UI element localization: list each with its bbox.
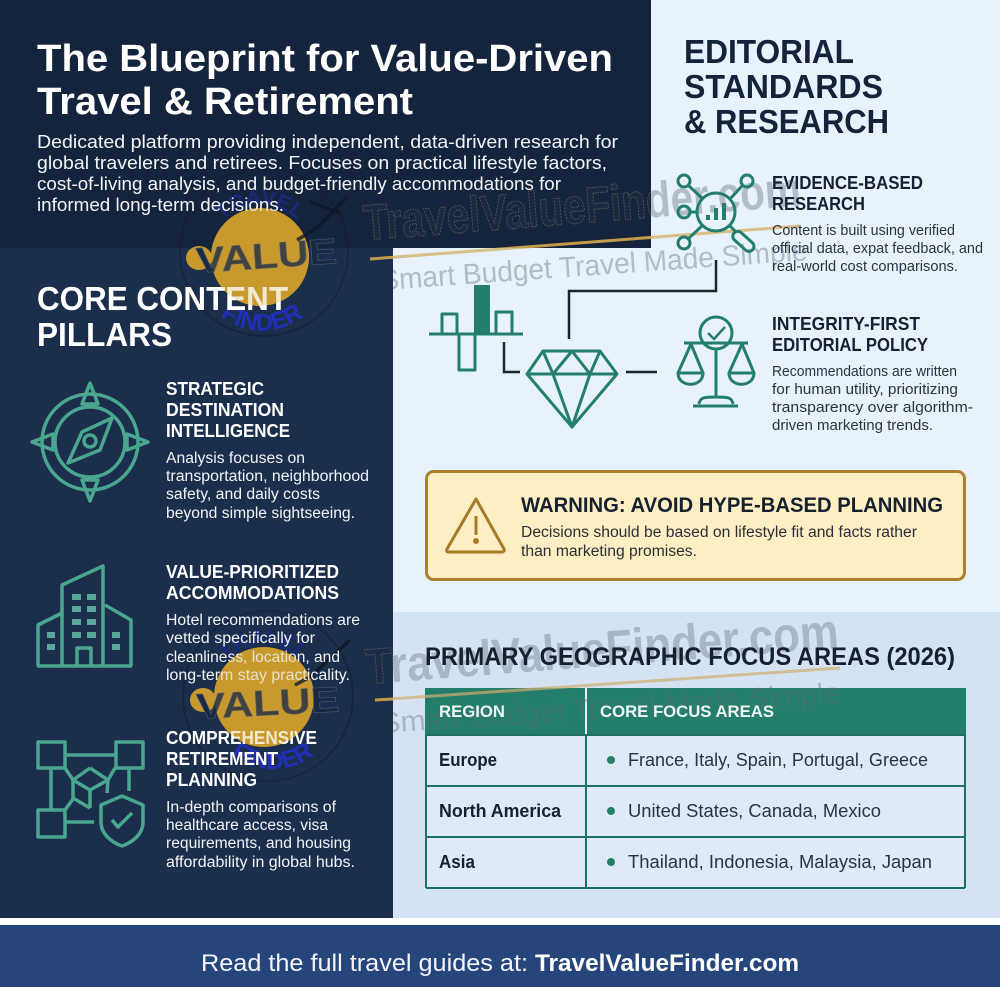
watermark: lower site name on dark: TravelValueFinder.com <box>364 603 840 695</box>
watermark: lower logo: FINDER <box>232 742 314 770</box>
text: integrity-first editorial policy: for human utility, prioritizing <box>772 382 958 398</box>
pillar: value-prioritized accommodations: vetted specifically for <box>166 630 315 647</box>
table: geographic focus: Asia <box>439 852 476 872</box>
text: integrity-first editorial policy: transparency over algorithm- <box>772 400 973 416</box>
watermark: lower site name on light: TravelValueFinder.com <box>364 603 840 695</box>
table: geographic focus <box>426 702 965 888</box>
pillar: comprehensive retirement planning: PLANNING <box>166 770 257 790</box>
icon: evidence network magnifier <box>678 175 756 253</box>
intro paragraph: cost-of-living analysis, and budget-friendly accommodations for <box>37 173 561 194</box>
icon: building <box>37 566 132 666</box>
pillar: value-prioritized accommodations <box>166 562 360 684</box>
pillar: comprehensive retirement planning: RETIREMENT <box>166 749 278 769</box>
panel: header background <box>0 0 651 248</box>
text: integrity-first editorial policy: Recommendations are written <box>772 364 957 380</box>
watermark: lower logo: VALUE <box>195 679 340 727</box>
text: evidence-based research: EVIDENCE-BASED <box>772 173 923 193</box>
pillar: strategic destination intelligence <box>166 379 369 522</box>
icon: retirement planning network <box>38 742 143 846</box>
watermark: lower site name on light: Smart Budget Travel Made Simple <box>379 678 841 740</box>
table: geographic focus: Europe <box>439 750 497 770</box>
text: integrity-first editorial policy: INTEGRITY-FIRST <box>772 314 920 334</box>
watermark: upper site name on light: TravelValueFinder.com <box>361 161 803 251</box>
panel: geographic focus background <box>393 612 1000 918</box>
pillar: comprehensive retirement planning: In-depth comparisons of <box>166 799 337 816</box>
text: evidence-based research <box>772 173 983 275</box>
pillar: comprehensive retirement planning: healthcare access, visa <box>166 817 328 834</box>
table: geographic focus: North America <box>439 801 562 821</box>
pillar: value-prioritized accommodations: Hotel recommendations are <box>166 612 360 629</box>
pillar: value-prioritized accommodations: VALUE-PRIORITIZED <box>166 562 339 582</box>
watermark: upper logo: TRAVEL <box>214 190 300 220</box>
connector: research to diamond <box>569 260 716 339</box>
watermark: lower logo: TRAVEL <box>218 630 304 660</box>
pillar: comprehensive retirement planning: affordability in global hubs. <box>166 854 355 871</box>
pillar: comprehensive retirement planning <box>166 728 355 871</box>
heading: core content pillars: CORE CONTENT <box>37 280 288 317</box>
text: evidence-based research: real-world cost comparisons. <box>772 259 958 275</box>
table: geographic focus: Thailand, Indonesia, Malaysia, Japan <box>628 852 932 872</box>
heading: core content pillars <box>37 280 288 353</box>
heading: editorial standards and research: & RESEARCH <box>684 103 889 140</box>
watermark: upper site name on dark: TravelValueFinder.com <box>361 161 803 251</box>
pillar: strategic destination intelligence: Analysis focuses on <box>166 450 305 467</box>
table: header band <box>425 688 966 735</box>
heading: primary geographic focus areas: PRIMARY GEOGRAPHIC FOCUS AREAS (2026) <box>425 643 955 671</box>
pillar: comprehensive retirement planning: COMPREHENSIVE <box>166 728 317 748</box>
watermark: upper logo: FINDER <box>222 304 304 331</box>
intro paragraph <box>37 131 618 215</box>
footer call to action <box>201 950 799 977</box>
watermark: upper site name on light: Smart Budget Travel Made Simple <box>379 235 808 297</box>
text: integrity-first editorial policy: driven marketing trends. <box>772 418 933 434</box>
callout: warning: than marketing promises. <box>521 543 697 560</box>
heading: core content pillars: PILLARS <box>37 316 172 353</box>
watermark: upper site name on dark <box>362 183 651 260</box>
pillar: comprehensive retirement planning: requirements, and housing <box>166 835 351 852</box>
table: geographic focus: United States, Canada, Mexico <box>628 801 881 821</box>
watermark: upper logo <box>179 168 349 337</box>
table: geographic focus: CORE FOCUS AREAS <box>600 702 774 721</box>
table: geographic focus: REGION <box>439 702 505 721</box>
footer call to action: Read the full travel guides at: <box>201 950 528 977</box>
text: integrity-first editorial policy: EDITORIAL POLICY <box>772 335 928 355</box>
pillar: value-prioritized accommodations: long-term stay practicality. <box>166 667 350 684</box>
intro paragraph: global travelers and retirees. Focuses on practical lifestyle factors, <box>37 152 607 173</box>
title <box>37 38 613 123</box>
panel: left column background <box>0 248 393 918</box>
title: The Blueprint for Value-Driven <box>37 38 613 80</box>
heading: editorial standards and research <box>684 33 889 140</box>
panel: footer background <box>0 925 1000 987</box>
text: integrity-first editorial policy <box>772 314 973 434</box>
pillar: strategic destination intelligence: INTELLIGENCE <box>166 421 290 441</box>
connector: diamond to scales <box>626 371 657 373</box>
icon: diamond <box>527 351 617 427</box>
watermark: lower site name on light <box>393 622 840 732</box>
pillar: value-prioritized accommodations: cleanliness, location, and <box>166 649 340 666</box>
watermark: upper site name on light <box>393 180 806 290</box>
pillar: strategic destination intelligence: DESTINATION <box>166 400 284 420</box>
callout: warning <box>426 472 964 580</box>
text: evidence-based research: RESEARCH <box>772 194 865 214</box>
pillar: strategic destination intelligence: beyond simple sightseeing. <box>166 505 355 522</box>
table: geographic focus: France, Italy, Spain, Portugal, Greece <box>628 750 928 770</box>
intro paragraph: informed long-term decisions. <box>37 194 284 215</box>
text: evidence-based research: official data, expat feedback, and <box>772 241 983 257</box>
callout: warning: Decisions should be based on lifestyle fit and facts rather <box>521 524 917 541</box>
pillar: value-prioritized accommodations: ACCOMMODATIONS <box>166 583 339 603</box>
icon: scales with check <box>678 317 754 406</box>
heading: editorial standards and research: EDITORIAL <box>684 33 854 70</box>
pillar: strategic destination intelligence: STRATEGIC <box>166 379 264 399</box>
title: Travel & Retirement <box>37 81 413 123</box>
panel: right column background <box>393 0 1000 612</box>
footer call to action: TravelValueFinder.com <box>535 950 799 977</box>
watermark: lower logo <box>182 610 354 782</box>
icon: compass <box>32 383 148 501</box>
connector: bars to diamond <box>504 342 520 372</box>
pillar: strategic destination intelligence: transportation, neighborhood <box>166 468 369 485</box>
pillar: strategic destination intelligence: safety, and daily costs <box>166 486 320 503</box>
intro paragraph: Dedicated platform providing independent, data-driven research for <box>37 131 618 152</box>
callout: warning: WARNING: AVOID HYPE-BASED PLANNING <box>521 494 943 517</box>
heading: editorial standards and research: STANDARDS <box>684 68 883 105</box>
watermark: upper logo: VALUE <box>195 230 338 281</box>
text: evidence-based research: Content is built using verified <box>772 223 955 239</box>
icon: bar chart <box>429 285 523 370</box>
icon: warning triangle <box>447 499 504 552</box>
